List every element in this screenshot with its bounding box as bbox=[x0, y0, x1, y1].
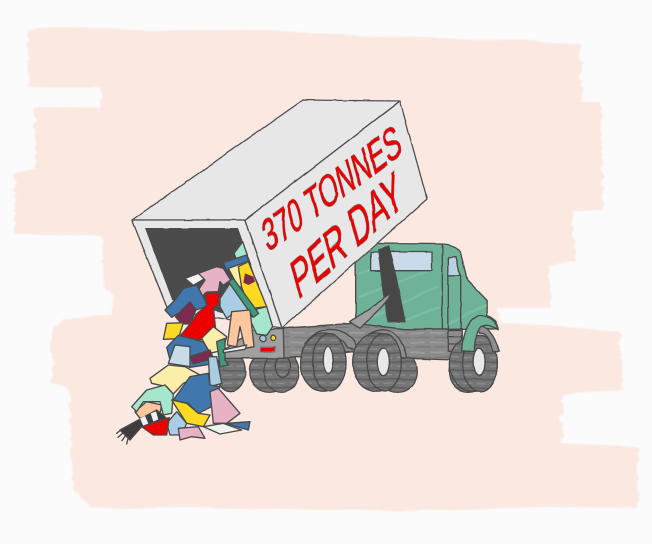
label: 370 tonnes: 370 TONNES bbox=[257, 116, 406, 263]
pile of clothes bbox=[117, 242, 273, 444]
container top face bbox=[132, 100, 400, 220]
chassis and bumper bbox=[223, 323, 462, 360]
label: per day: PER DAY bbox=[286, 161, 408, 312]
container side face bbox=[245, 101, 427, 328]
truck cab bbox=[356, 243, 499, 330]
dark opening bbox=[145, 228, 272, 325]
tipped container bbox=[132, 100, 427, 328]
container rear face bbox=[132, 220, 282, 328]
wheels behind chassis bbox=[216, 351, 488, 392]
hydraulic ram bbox=[350, 247, 405, 328]
dump truck bbox=[132, 100, 499, 392]
front wheels and fenders bbox=[301, 315, 499, 392]
tail light bbox=[260, 347, 275, 352]
